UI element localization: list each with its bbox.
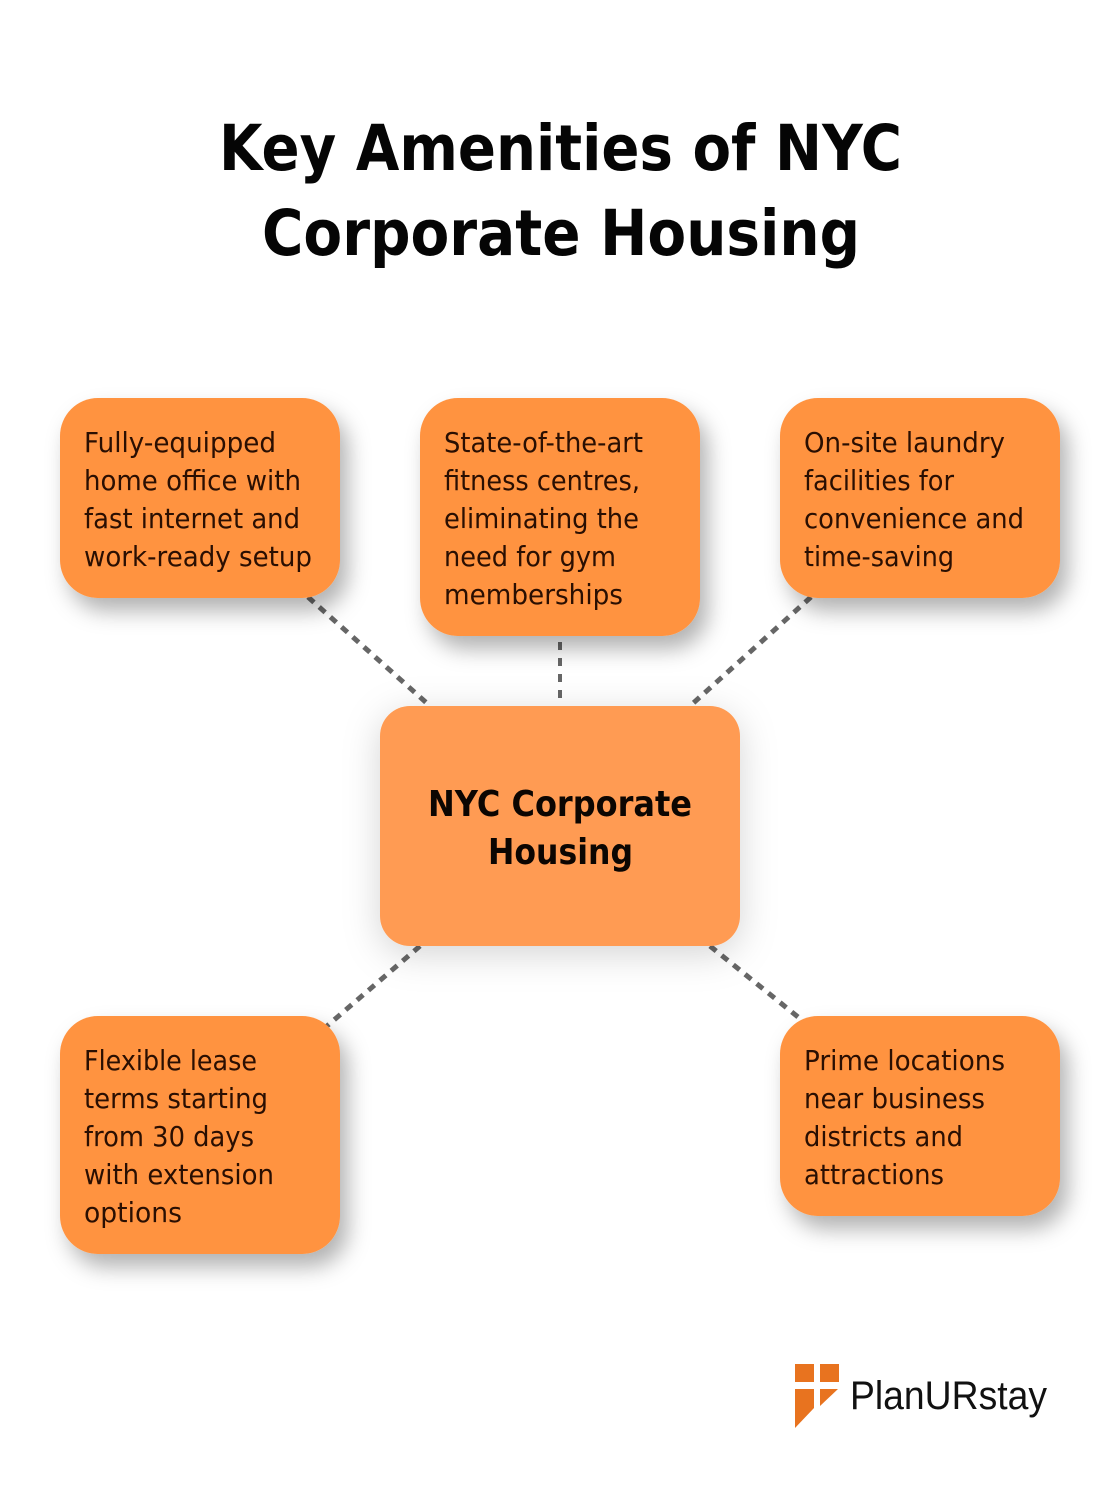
connector: lease to center (327, 946, 420, 1026)
connector: home office to center (308, 597, 430, 706)
card: locations (780, 1016, 1060, 1216)
card: laundry: facilities for (804, 465, 955, 497)
card: home office: home office with (84, 465, 301, 497)
logo (795, 1364, 1047, 1428)
logo wordmark: PlanURstay (850, 1374, 1047, 1418)
card: locations: near business (804, 1083, 985, 1115)
connector: fitness to center (558, 642, 562, 698)
card: fitness: eliminating the (444, 503, 639, 535)
center box: Housing (488, 832, 633, 873)
icon: logo mark (795, 1364, 839, 1428)
card: lease: from 30 days (84, 1121, 254, 1153)
card: lease (60, 1016, 340, 1254)
card: home office: fast internet and (84, 503, 300, 535)
card: laundry: On-site laundry (804, 427, 1005, 459)
card: laundry: time-saving (804, 541, 954, 573)
card: lease: Flexible lease (84, 1045, 257, 1077)
card: fitness: memberships (444, 579, 623, 611)
card: home office (60, 398, 340, 598)
title: Key Amenities of NYC (219, 112, 902, 185)
card: laundry: convenience and (804, 503, 1024, 535)
card: fitness: need for gym (444, 541, 616, 573)
card: laundry (780, 398, 1060, 598)
card: fitness: State-of-the-art (444, 427, 643, 459)
card: fitness: fitness centres, (444, 465, 640, 497)
center box: NYC Corporate (428, 784, 692, 825)
card: lease: terms starting (84, 1083, 268, 1115)
card: lease: with extension (84, 1159, 274, 1191)
card: locations: attractions (804, 1159, 944, 1191)
card: lease: options (84, 1197, 182, 1229)
card: fitness (420, 398, 700, 636)
title (219, 112, 902, 270)
title: Corporate Housing (262, 197, 860, 270)
connector: locations to center (710, 946, 803, 1021)
card: home office: Fully-equipped (84, 427, 276, 459)
connector: laundry to center (690, 597, 811, 706)
card: home office: work-ready setup (84, 541, 312, 573)
card: locations: districts and (804, 1121, 963, 1153)
card: locations: Prime locations (804, 1045, 1005, 1077)
center box (380, 706, 740, 946)
